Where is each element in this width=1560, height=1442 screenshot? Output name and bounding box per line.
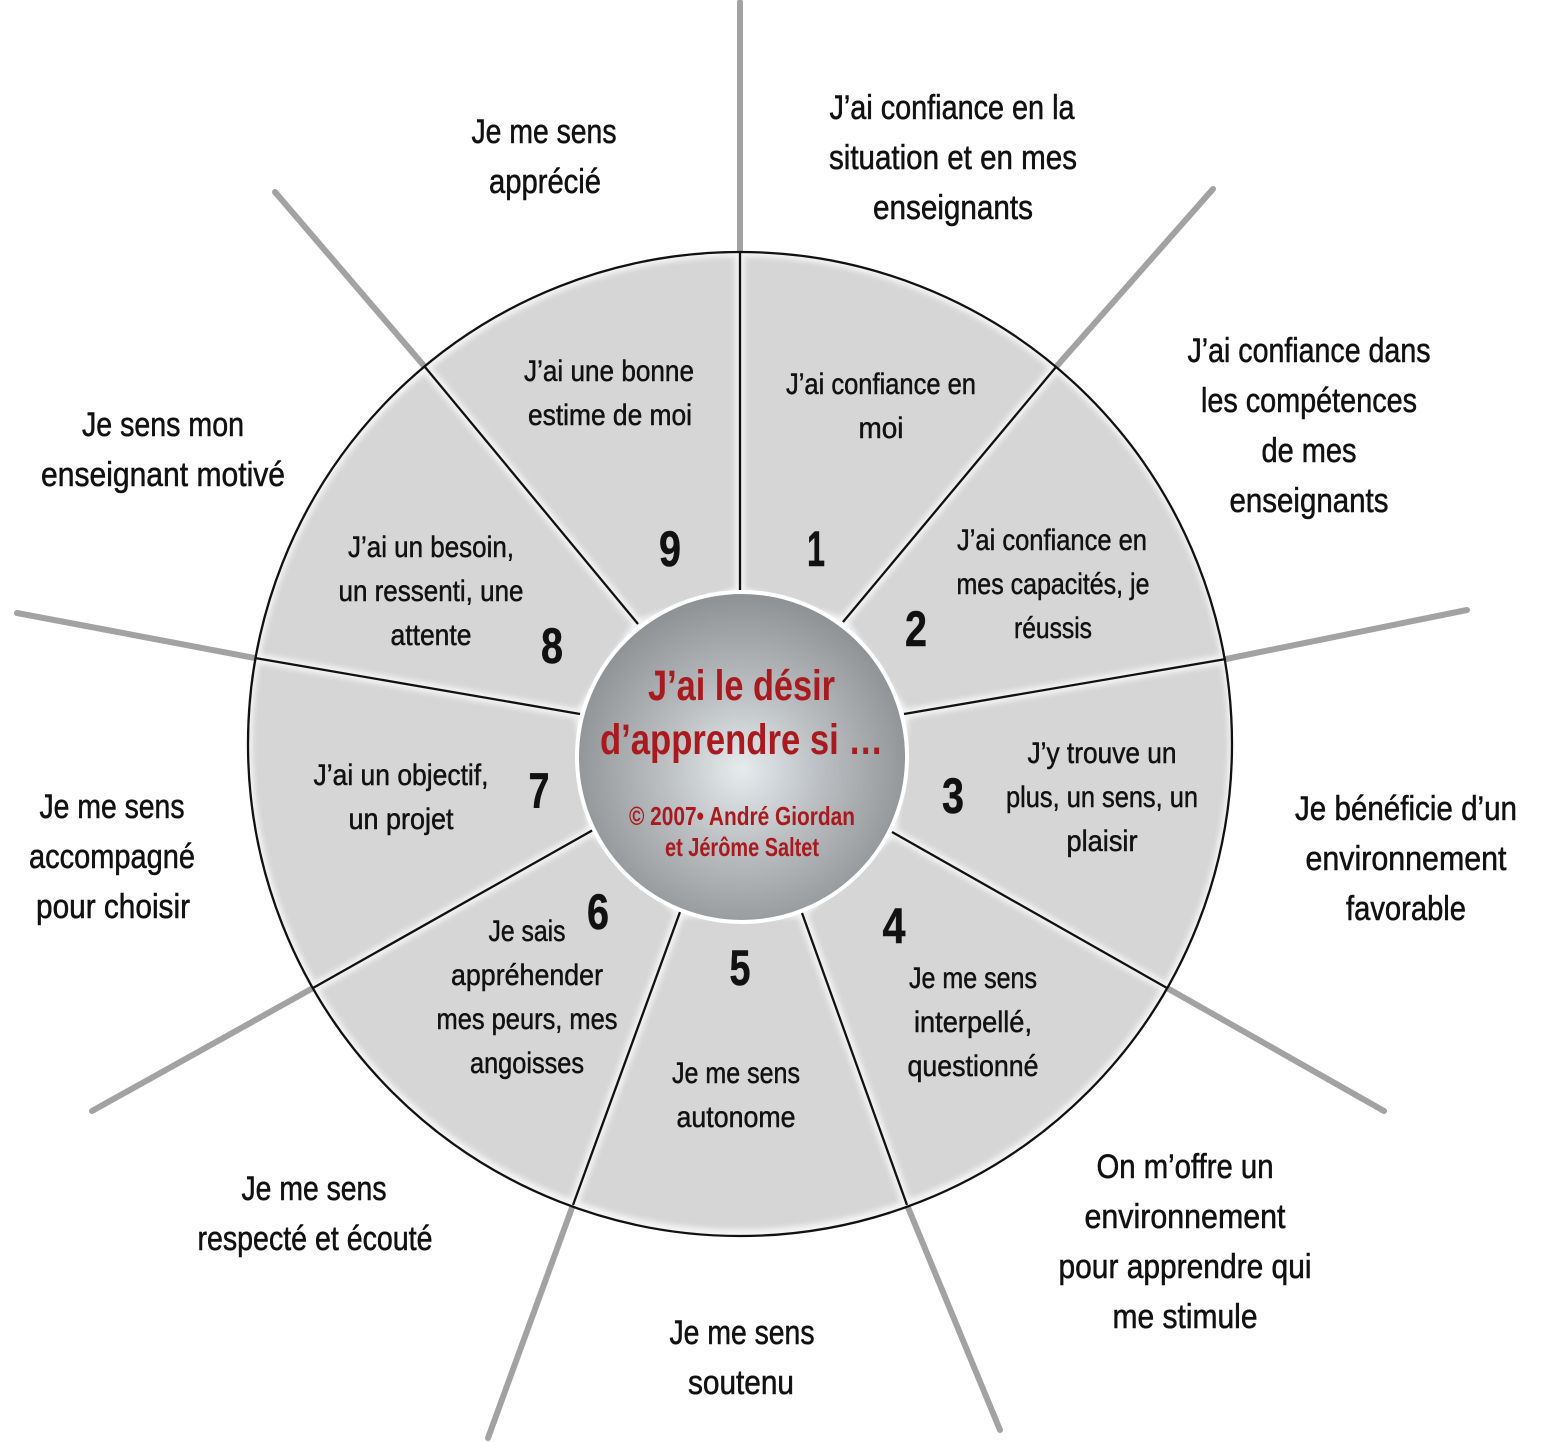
outer label 1: situation et en mes [829,139,1077,177]
sector numbers: 6 [587,884,609,940]
outer label 2: les compétences [1201,382,1417,420]
sector 1 text [786,368,976,445]
sector 1 text: J’ai confiance en [786,368,976,401]
outer label 3 [1295,790,1517,928]
sector numbers: 7 [528,763,550,819]
outer label 5 [670,1314,814,1402]
sector 4 text: interpellé, [914,1006,1032,1039]
sector 4 text: Je me sens [909,962,1037,995]
outer label 1 [829,89,1077,227]
outer label 9: Je me sens [472,113,616,151]
outer label 2: J’ai confiance dans [1188,332,1430,370]
sector 5 text: autonome [676,1101,796,1134]
sector 3 text: J’y trouve un [1028,737,1176,770]
centre title: d’apprendre si … [600,716,883,764]
sector 9 text: J’ai une bonne [524,355,694,388]
sector 9 text: estime de moi [528,399,692,432]
sector 7 text: un projet [348,803,454,836]
outer label 2: de mes [1262,432,1356,470]
sector numbers [528,521,964,996]
sector numbers: 4 [882,898,906,954]
sector numbers: 5 [730,940,750,996]
sector numbers: 1 [807,521,825,577]
outer label 8 [41,406,285,494]
sector 3 text: plus, un sens, un [1006,781,1198,814]
outer label 7 [29,788,195,926]
sector 7 text [314,759,488,836]
sector 5 text: Je me sens [672,1057,800,1090]
outer label 5: Je me sens [670,1314,814,1352]
outer label 4: me stimule [1112,1298,1258,1336]
sector 5 text [672,1057,800,1134]
outer label 8: enseignant motivé [41,456,285,494]
sector 3 text: plaisir [1066,825,1138,858]
sector 6 text: angoisses [470,1047,584,1080]
outer label 6 [198,1170,432,1258]
sector 8 text [338,531,524,652]
centre copyright: et Jérôme Saltet [665,832,819,862]
centre title [600,662,883,764]
outer label 7: accompagné [29,838,195,876]
sector 6 text: Je sais [488,915,566,948]
outer label 5: soutenu [688,1364,794,1402]
outer label 4: environnement [1084,1198,1286,1236]
sector 2 text: mes capacités, je [956,568,1150,601]
sector 8 text: un ressenti, une [338,575,524,608]
outer label 3: Je bénéficie d’un [1295,790,1517,828]
sector 4 text: questionné [908,1050,1038,1083]
centre copyright: © 2007• André Giordan [629,801,855,831]
sector 3 text [1006,737,1198,858]
sector 2 text: J’ai confiance en [957,524,1147,557]
outer label 9: apprécié [489,163,601,201]
sector 8 text: J’ai un besoin, [348,531,514,564]
sector 7 text: J’ai un objectif, [314,759,488,792]
sector 2 text: réussis [1014,612,1092,645]
sector 8 text: attente [390,619,472,652]
sector 6 text: appréhender [451,959,603,992]
sector 4 text [908,962,1038,1083]
outer label 4 [1058,1148,1312,1336]
outer label 2: enseignants [1230,482,1388,520]
outer label 2 [1188,332,1430,520]
sector 6 text: mes peurs, mes [436,1003,618,1036]
sector 6 text [436,915,618,1080]
centre title: J’ai le désir [648,662,835,710]
outer label 3: environnement [1306,840,1507,878]
outer label 6: Je me sens [242,1170,386,1208]
outer label 9 [472,113,616,201]
outer label 4: pour apprendre qui [1058,1248,1312,1286]
outer label 4: On m’offre un [1096,1148,1274,1186]
outer label 3: favorable [1346,890,1466,928]
sector 1 text: moi [858,412,904,445]
outer label 1: enseignants [873,189,1033,227]
outer label 7: Je me sens [40,788,184,826]
sector 2 text [956,524,1150,645]
sector numbers: 9 [659,521,681,577]
outer label 7: pour choisir [36,888,190,926]
wheel disc with nine sectors [248,252,1233,1236]
centre copyright [629,801,855,862]
outer label 8: Je sens mon [82,406,244,444]
outer label 6: respecté et écouté [198,1220,432,1258]
centre sphere [577,592,907,922]
sector numbers: 3 [942,768,964,824]
sector numbers: 2 [905,601,927,657]
outer label 1: J’ai confiance en la [830,89,1075,127]
sector numbers: 8 [541,618,563,674]
sector 9 text [524,355,694,432]
